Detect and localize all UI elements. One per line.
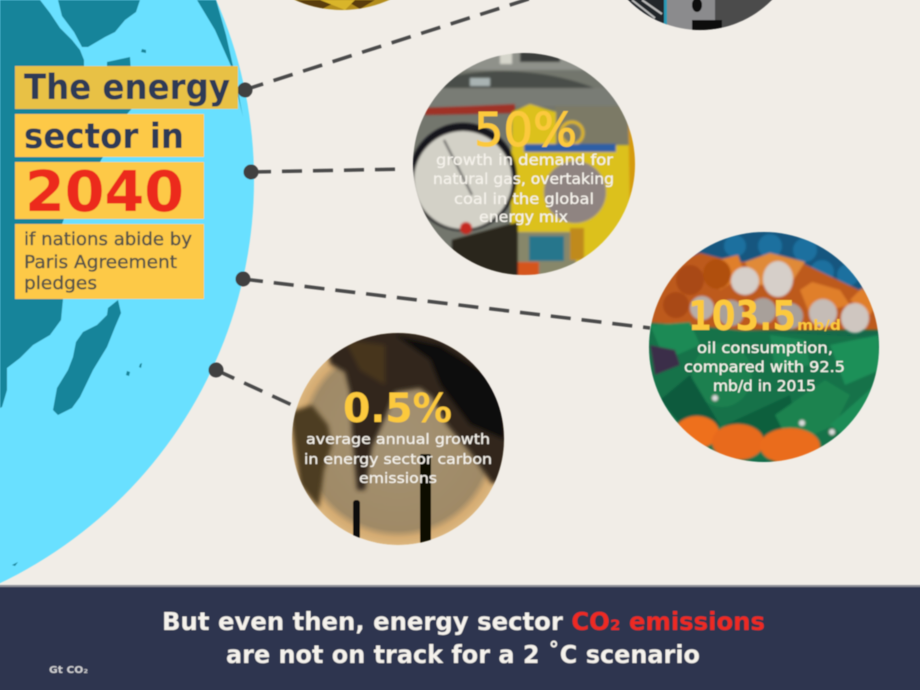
globe with continents (0, 0, 254, 627)
axis label: Gt CO₂ (49, 665, 88, 676)
stat: carbon 0.5% (304, 386, 492, 487)
stat: carbon 0.5%: emissions (359, 471, 437, 487)
connector line: top circle (238, 0, 535, 98)
subtitle: Paris pledges: if nations abide by (24, 230, 192, 250)
stat: natural gas 50%: coal in the global (454, 190, 594, 208)
footer band (0, 585, 920, 690)
stat: oil 103.5 mb/d (684, 292, 845, 395)
stat: carbon 0.5%: average annual growth (306, 432, 490, 448)
stat: oil 103.5 mb/d: oil consumption, (697, 339, 833, 357)
stat: oil 103.5 mb/d: compared with 92.5 (684, 358, 845, 376)
stat: natural gas 50% (433, 103, 614, 226)
subtitle: Paris pledges (15, 224, 204, 299)
stat: natural gas 50%: 50% (474, 103, 577, 157)
footer headline: But even then, energy sector CO₂ emissions (162, 607, 765, 636)
circle: oil barrels photo (645, 230, 885, 470)
stat: carbon 0.5%: in energy sector carbon (304, 452, 492, 468)
stat: oil 103.5 mb/d: mb/d (797, 318, 841, 334)
circle: natural gas gauge photo (409, 50, 640, 280)
connector line: oil (236, 272, 650, 328)
stat: oil 103.5 mb/d: mb/d in 2015 (713, 377, 816, 395)
stat: natural gas 50%: natural gas, overtaking (433, 170, 614, 188)
subtitle: Paris pledges: pledges (24, 274, 97, 294)
circle: smokestacks photo (290, 328, 510, 550)
connector line: carbon emissions (208, 362, 292, 405)
stat: carbon 0.5%: 0.5% (343, 386, 452, 432)
stat: natural gas 50%: energy mix (479, 208, 568, 226)
title line: sector in: sector in (24, 117, 184, 157)
title line: 2040: 2040 (25, 160, 184, 225)
circle: top-right photo fragment (627, 0, 773, 31)
title line: The energy: The energy (24, 68, 230, 108)
circle: top-left photo fragment (293, 0, 391, 11)
connector line: natural gas (244, 164, 405, 180)
stat: oil 103.5 mb/d: 103.5 (688, 292, 796, 340)
stat: natural gas 50%: growth in demand for (436, 151, 614, 169)
subtitle: Paris pledges: Paris Agreement (24, 253, 177, 273)
footer headline (162, 607, 765, 669)
footer headline: are not on track for a 2 ˚C scenario (226, 640, 700, 669)
